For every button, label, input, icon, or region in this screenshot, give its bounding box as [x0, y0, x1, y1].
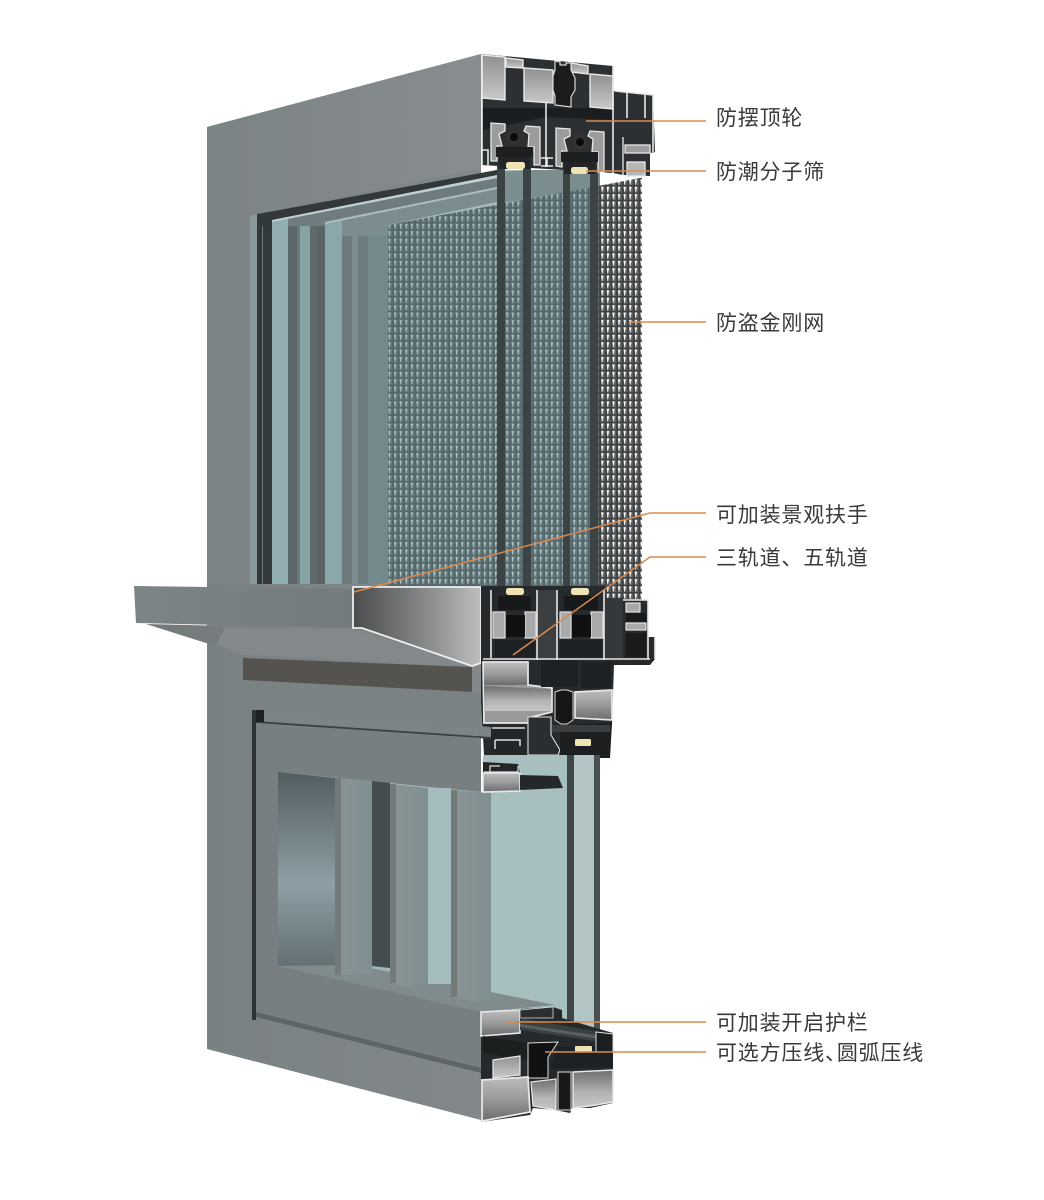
- thermal break: [553, 61, 575, 107]
- top frame section: [482, 54, 655, 176]
- security mesh over glass: [388, 170, 598, 590]
- label: optional guardrail: 可加装开启护栏: [716, 1012, 869, 1035]
- label: anti-sway top wheel: 防摆顶轮: [716, 107, 803, 130]
- security mesh over white: [598, 170, 642, 600]
- upper chamber: [481, 1010, 520, 1036]
- upper window: glazing and security mesh: [250, 166, 642, 600]
- lower chambers: [482, 1077, 530, 1121]
- glass layers seen in perspective: [250, 166, 600, 590]
- label: security diamond mesh: 防盗金刚网: [716, 312, 825, 335]
- lower sash head: [528, 717, 560, 755]
- sill: viewing handrail: [134, 586, 481, 670]
- label: three or five tracks: 三轨道、五轨道: [716, 547, 869, 570]
- wall: aluminium frame face: [207, 54, 481, 1120]
- bottom frame section: [481, 1007, 613, 1122]
- band below handrail: [243, 658, 472, 692]
- glass spacers lower: [567, 755, 574, 1045]
- middle tracks section: [481, 586, 655, 758]
- bottom recess strip: [256, 1012, 481, 1073]
- sash outlines: [483, 590, 655, 660]
- right track block: [623, 137, 650, 176]
- label: moisture-proof molecular sieve: 防潮分子筛: [716, 161, 825, 184]
- lower panel: [252, 710, 491, 1070]
- panel head section: [483, 762, 563, 792]
- center bar: [538, 590, 557, 658]
- large aluminium chambers: [483, 660, 612, 723]
- aluminium chambers: [482, 55, 613, 109]
- floor: [278, 965, 555, 1012]
- leader lines: [354, 121, 706, 1052]
- lower glazing and inner columns: [256, 755, 600, 1073]
- glazing caps and gaskets: [496, 147, 533, 157]
- column group: [335, 778, 491, 1001]
- labels: [716, 107, 924, 1065]
- glass unit spacers: [497, 165, 598, 590]
- transom face: [243, 680, 491, 727]
- top sashes: [491, 123, 604, 172]
- rail: [520, 1018, 600, 1042]
- label: optional glazing bead: 可选方压线、圆弧压线: [716, 1042, 924, 1065]
- label: optional handrail: 可加装景观扶手: [716, 504, 869, 527]
